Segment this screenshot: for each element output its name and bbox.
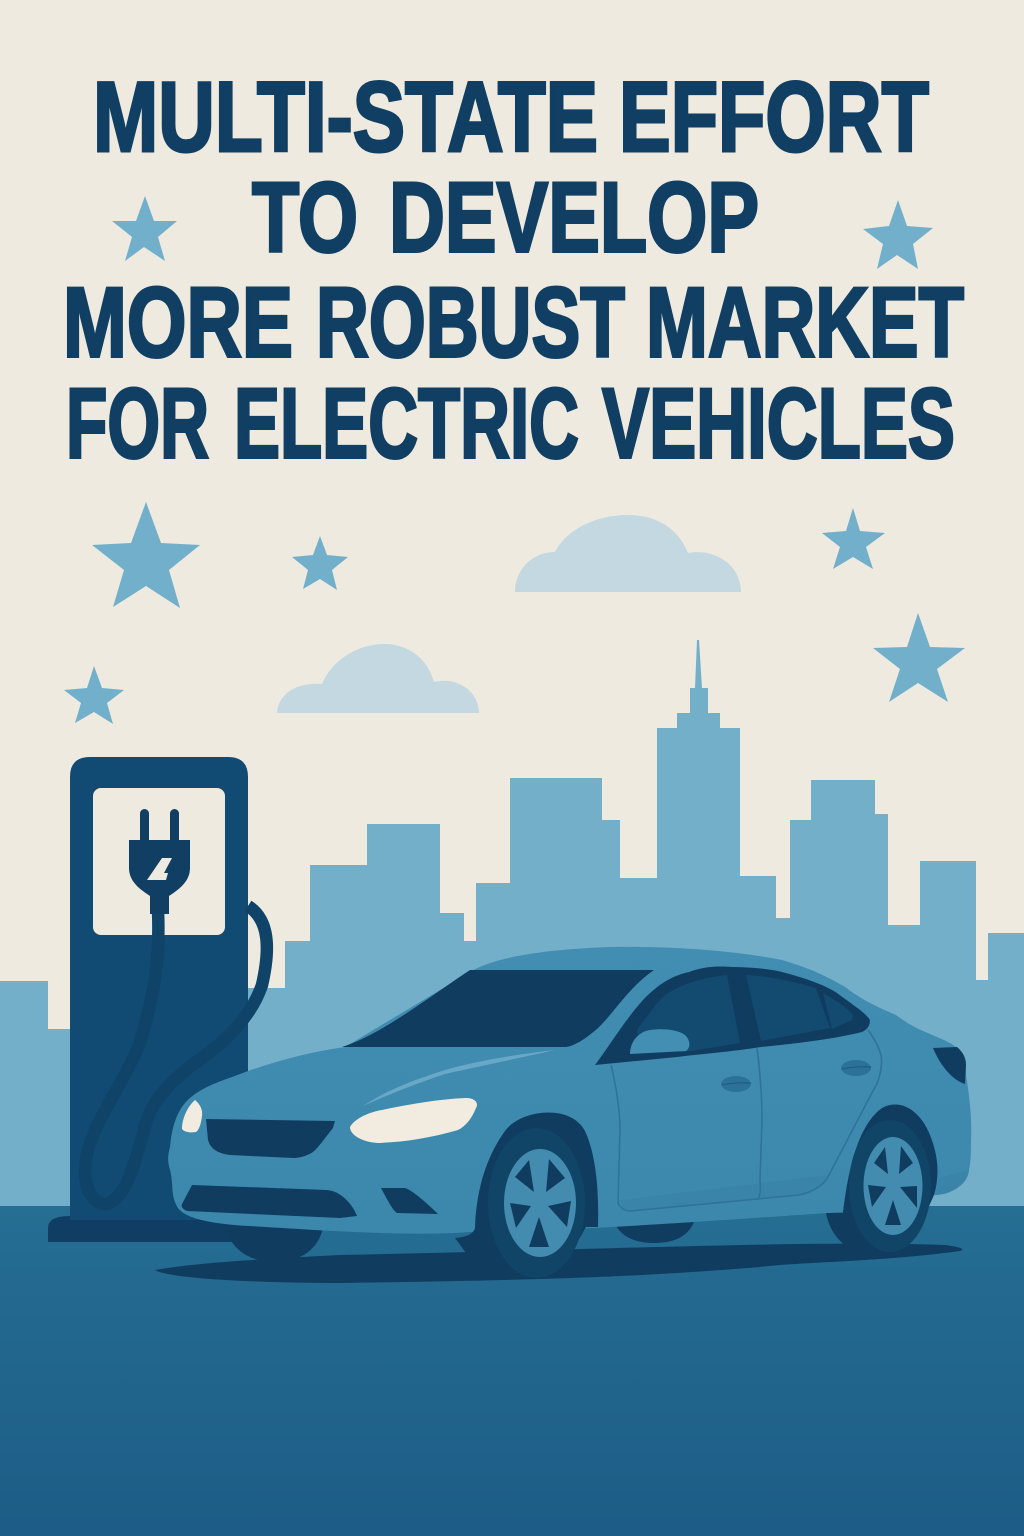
car — [155, 947, 971, 1283]
rear tyre back — [826, 1213, 880, 1245]
title — [63, 61, 964, 478]
title: MULTI-STATE — [93, 61, 598, 172]
hood crease — [363, 1050, 555, 1106]
lower intake — [182, 1185, 357, 1218]
pump body — [70, 757, 248, 1220]
rear side glass — [746, 975, 830, 1041]
cloud top right — [515, 515, 741, 592]
fog lamp — [381, 1188, 438, 1214]
rear wheel — [849, 1120, 931, 1252]
charging cable — [85, 906, 267, 1204]
title: MORE — [63, 266, 293, 378]
title: ROBUST — [316, 266, 625, 378]
cloud left — [277, 644, 479, 713]
far tyres — [225, 1222, 694, 1262]
windshield — [342, 970, 654, 1047]
city skyline — [0, 640, 1024, 1210]
title: TO — [252, 162, 358, 272]
title: ELECTRIC — [234, 368, 579, 478]
headlight — [350, 1098, 477, 1143]
front wheel — [488, 1128, 585, 1278]
charging station — [48, 757, 300, 1242]
tail light — [933, 1047, 966, 1084]
car shadow — [155, 1244, 962, 1283]
rear wheel arch — [843, 1104, 937, 1250]
front side glass — [637, 975, 740, 1052]
title: FOR — [66, 368, 209, 478]
side mirror — [630, 1029, 689, 1054]
plug icon — [129, 809, 190, 914]
pump base — [48, 1216, 300, 1242]
pump screen — [93, 788, 225, 935]
side window frame — [595, 967, 870, 1065]
ground — [0, 1206, 1024, 1536]
stars — [64, 196, 965, 724]
lower body shade — [619, 1170, 969, 1211]
left headlight — [182, 1100, 202, 1132]
title: DEVELOP — [389, 162, 759, 272]
grille — [206, 1119, 335, 1158]
front wheel arch — [455, 1113, 598, 1272]
rear door handle — [841, 1060, 871, 1076]
front door handle — [721, 1076, 751, 1092]
car body — [168, 947, 971, 1234]
title: EFFORT — [619, 61, 929, 172]
door lines — [611, 1030, 881, 1211]
rear quarter glass — [823, 993, 853, 1029]
